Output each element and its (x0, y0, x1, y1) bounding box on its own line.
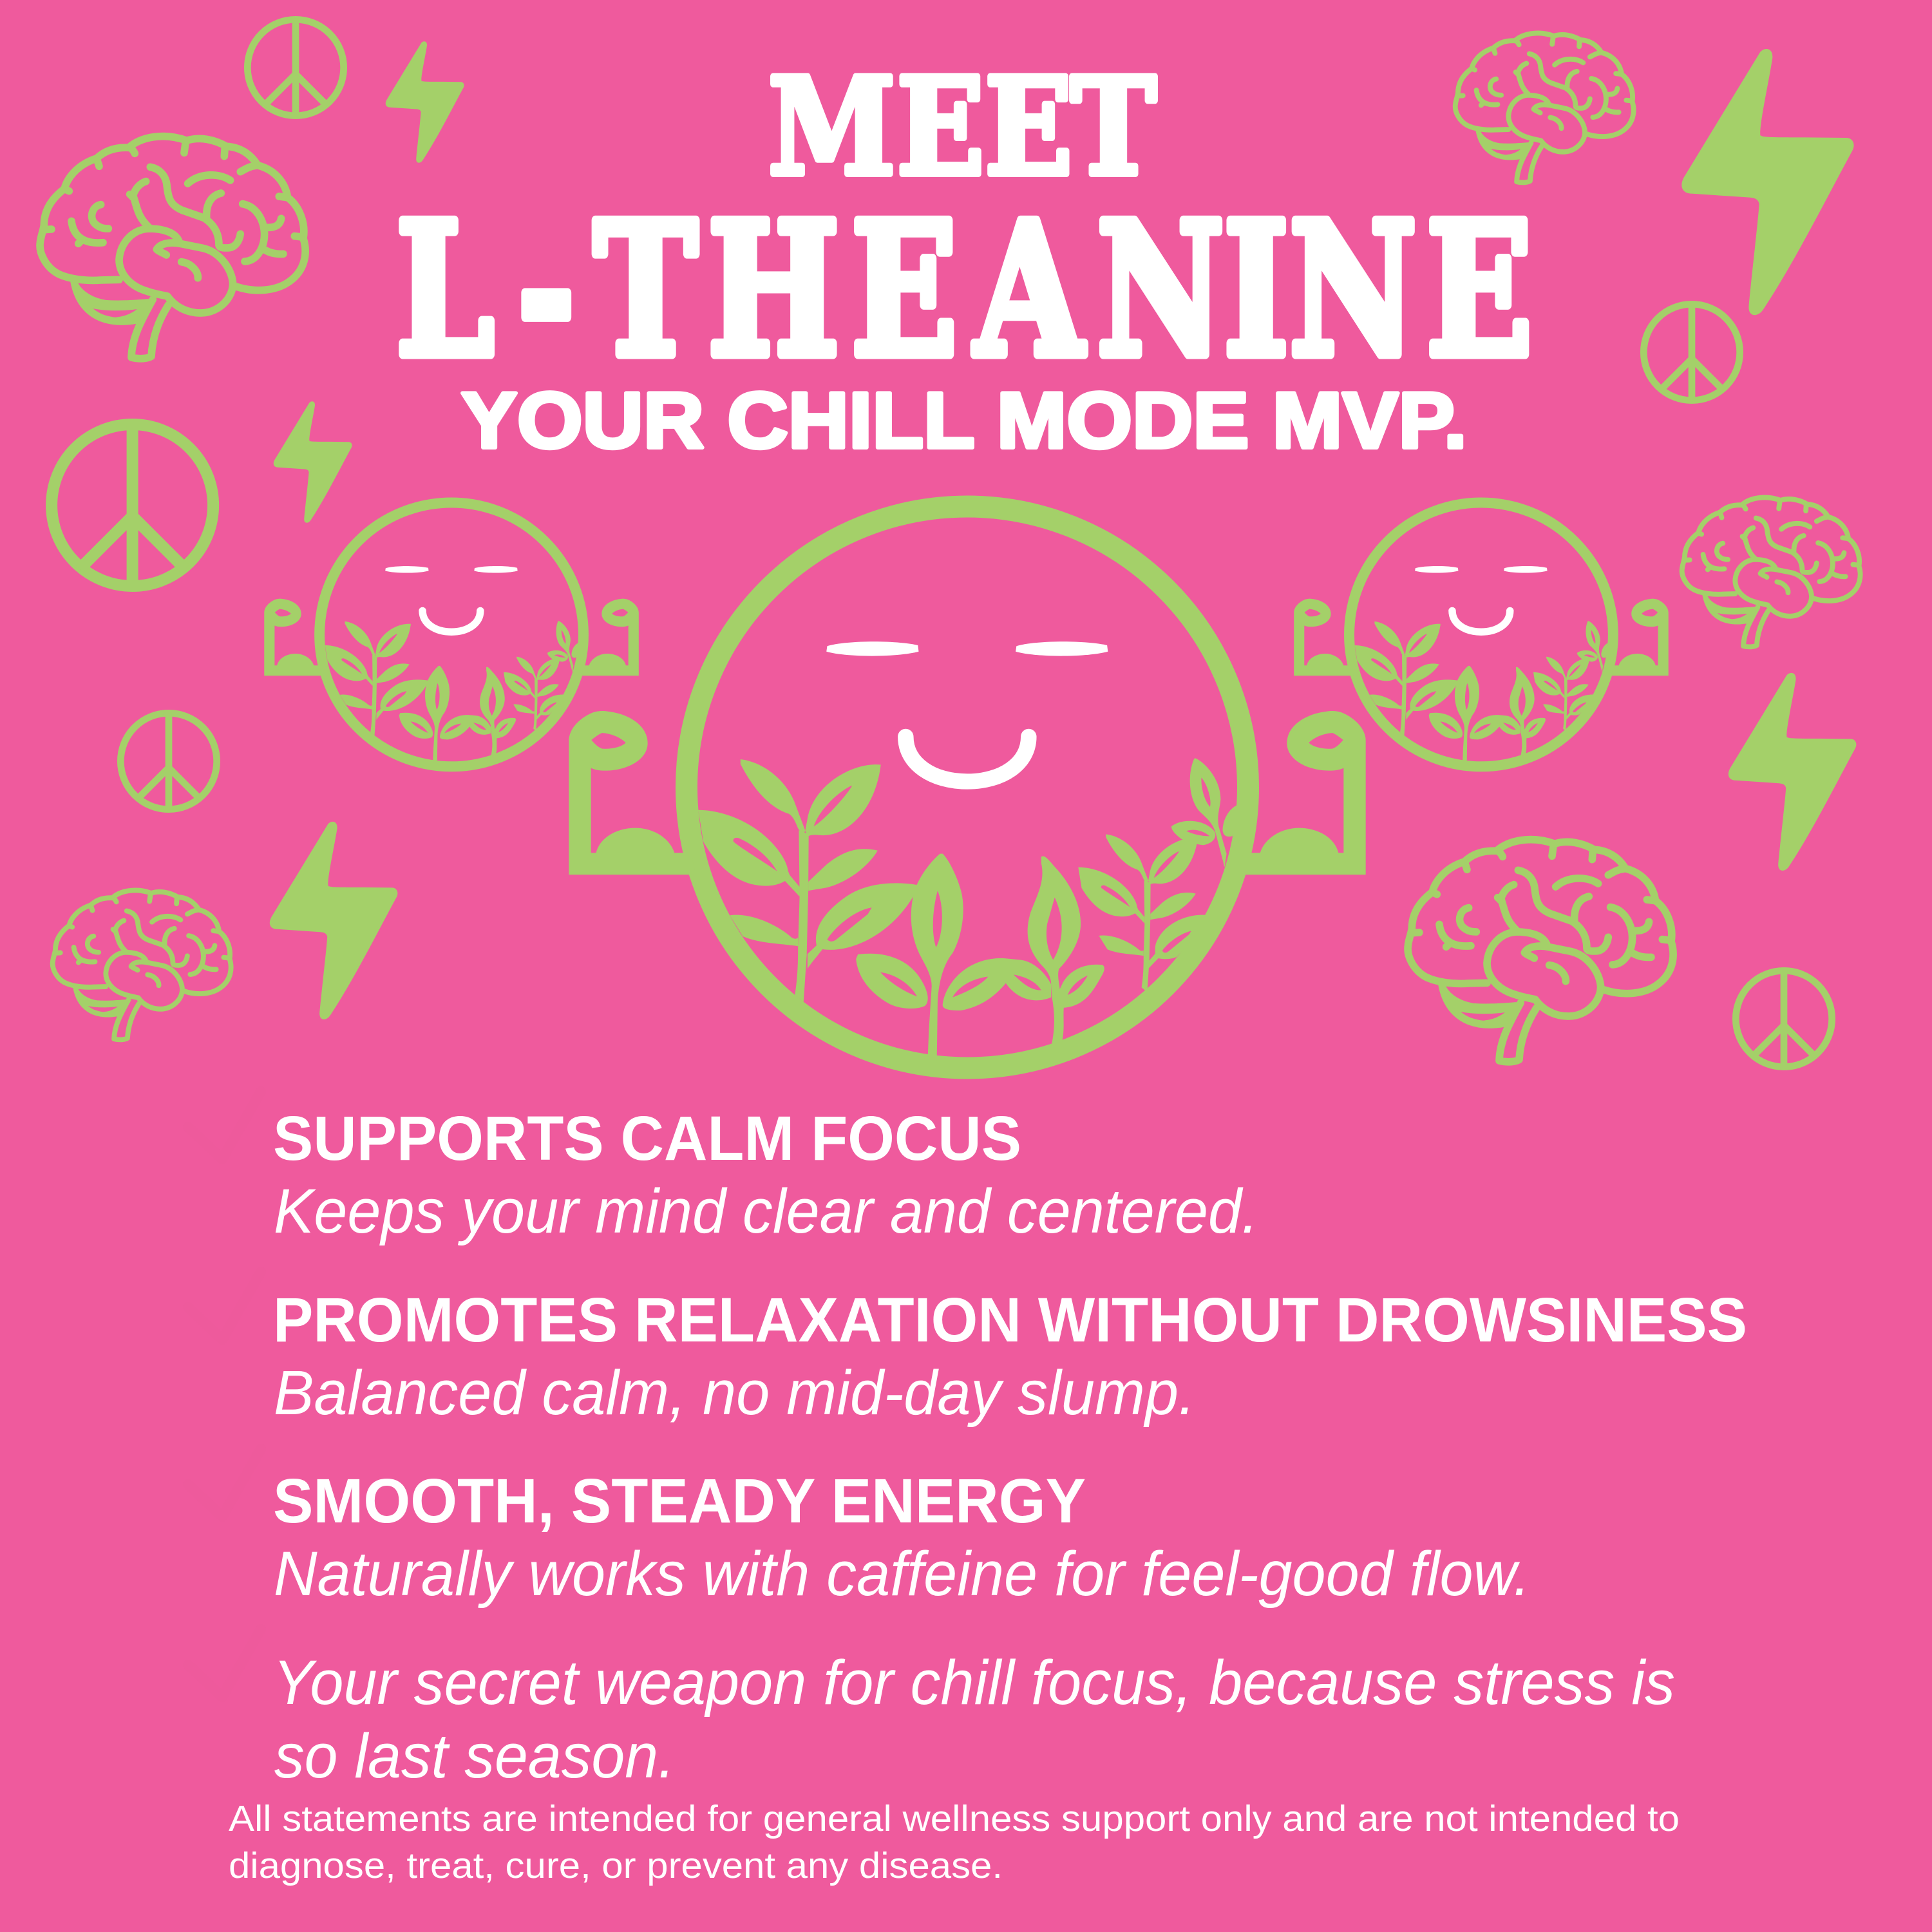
faint check marks (188, 1092, 261, 1697)
icon: lightning bolt right (1728, 673, 1856, 871)
benefit 3: SMOOTH, STEADY ENERGY (273, 1466, 1086, 1536)
disclaimer (229, 1798, 1680, 1886)
character: large flexing smiley with plants (569, 506, 1366, 1068)
benefit 2: Balanced calm, no mid-day slump. (274, 1358, 1195, 1428)
closing statement: so last season. (274, 1721, 675, 1791)
icon: large peace sign left (52, 424, 213, 586)
benefit 2 (273, 1285, 1747, 1428)
icon: peace sign lower left (120, 713, 217, 810)
benefit 2: PROMOTES RELAXATION WITHOUT DROWSINESS (273, 1285, 1747, 1355)
icon: brain right middle (1682, 497, 1861, 647)
icon: lightning bolt lower left (270, 822, 397, 1019)
closing statement: Your secret weapon for chill focus, because stress is (273, 1647, 1675, 1718)
icon: peace sign top (247, 19, 344, 116)
benefit 1 (273, 1103, 1258, 1246)
icon: peace sign right (1643, 304, 1740, 401)
icon: peace sign lower right (1736, 971, 1832, 1067)
icon: large brain top left (40, 137, 305, 359)
icon: brain bottom left (53, 890, 231, 1039)
disclaimer: diagnose, treat, cure, or prevent any disease. (229, 1845, 1003, 1886)
icon: brain top right (1455, 33, 1634, 182)
icon: large brain bottom right (1408, 840, 1673, 1062)
icon: large lightning bolt top right (1681, 49, 1854, 315)
benefit 1: Keeps your mind clear and centered. (274, 1176, 1258, 1246)
title: Meet: MEET (768, 48, 1156, 205)
character: small flexing smiley right (1294, 502, 1669, 766)
closing statement (273, 1647, 1675, 1791)
disclaimer: All statements are intended for general wellness support only and are not intended to (229, 1798, 1680, 1839)
icon: small lightning bolt top (386, 41, 464, 163)
character: small flexing smiley left (264, 502, 639, 766)
benefit 3 (273, 1466, 1530, 1609)
icon: small lightning bolt left (274, 401, 352, 523)
subtitle: YOUR CHILL MODE MVP. (461, 377, 1467, 465)
benefit 1: SUPPORTS CALM FOCUS (273, 1103, 1021, 1173)
title: L-Theanine: L-THEANINE (396, 182, 1533, 398)
benefit 3: Naturally works with caffeine for feel-good flow. (274, 1539, 1530, 1609)
